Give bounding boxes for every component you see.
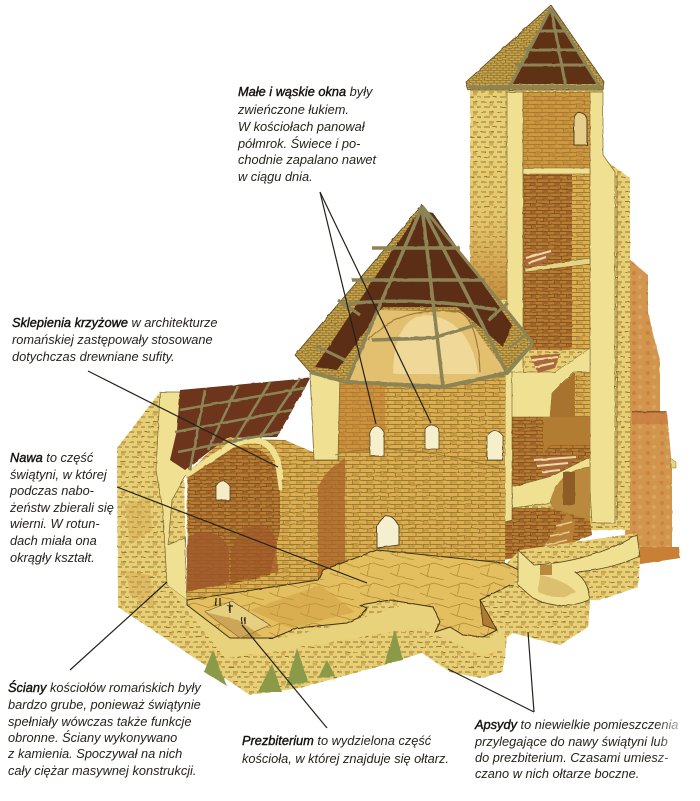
nave roof xyxy=(170,378,310,470)
tower interior side xyxy=(572,173,590,350)
text: okna: Małe i wąskie okna były xyxy=(238,84,372,99)
room lower xyxy=(503,508,592,560)
leader: okna right xyxy=(320,192,431,423)
nave vault interior xyxy=(188,447,280,590)
main body xyxy=(117,372,638,695)
pale cross wall xyxy=(505,348,590,417)
tower cut wall right xyxy=(590,92,615,523)
leader: apsydy left xyxy=(448,669,534,712)
vault rib xyxy=(186,440,282,490)
text: apsydy: czano w nich ołtarze boczne. xyxy=(475,766,639,781)
text: okna: W kościołach panował xyxy=(238,119,366,134)
text: prezbiterium: Prezbiterium to wydzielona część xyxy=(242,733,431,748)
small niche xyxy=(480,600,497,630)
leader: sklepienia xyxy=(88,371,278,467)
outer body silhouette xyxy=(117,392,638,695)
text: apsydy: do prezbiterium. Czasami umiesz- xyxy=(475,750,668,765)
text: nawa: wierni. W rotun- xyxy=(10,516,100,531)
tower window xyxy=(574,113,587,145)
text: nawa: okrągły kształt. xyxy=(10,550,95,565)
left wall blotches xyxy=(125,495,155,610)
text: okna: półmrok. Świece i po- xyxy=(237,136,360,151)
roof eave xyxy=(310,343,533,387)
tower floors xyxy=(523,168,590,174)
rotunda upper orange xyxy=(338,380,385,452)
stair 3 xyxy=(532,455,580,477)
leader: prezbiterium xyxy=(242,625,327,728)
text: sklepienia: dotychczas drewniane sufity. xyxy=(12,349,175,364)
conical roof xyxy=(295,205,533,387)
arch opening lower xyxy=(550,467,590,520)
nave window xyxy=(216,481,230,500)
pale floor band xyxy=(512,457,590,508)
nave floor shade xyxy=(250,585,355,628)
roof rafters xyxy=(343,207,507,387)
tower cut wall left xyxy=(507,92,523,400)
upper pier xyxy=(310,373,340,460)
text: nawa: dach miała ona xyxy=(10,533,97,548)
text: okna: zwieńczone łukiem. xyxy=(237,102,349,117)
pale column xyxy=(505,372,512,522)
stair 1 xyxy=(525,248,553,267)
text: sklepienia: Sklepienia krzyżowe w architekturze xyxy=(12,315,218,330)
floor and front wall xyxy=(167,550,528,658)
arch opening upper xyxy=(550,372,590,445)
tower roof rafters xyxy=(510,8,598,88)
text: sciany: spełniały wówczas także funkcje xyxy=(8,714,192,729)
tower interior lower xyxy=(523,173,572,350)
wing nub xyxy=(670,458,676,468)
text: okna: w ciągu dnia. xyxy=(238,169,313,184)
text: nawa: żeństw zbierali się xyxy=(9,500,114,515)
text: sklepienia: romańskiej zastępowały stosowane xyxy=(12,332,213,347)
text: okna: chodnie zapalano nawet xyxy=(238,152,376,167)
stair 4 xyxy=(541,512,575,550)
tower outer walls xyxy=(470,86,630,530)
leader: nawa xyxy=(117,487,367,583)
text: nawa: Nawa to część xyxy=(10,450,93,465)
rotunda windows xyxy=(370,426,384,456)
tower roof panels xyxy=(512,11,596,84)
roof dark panels xyxy=(315,210,512,370)
tower roof xyxy=(466,5,604,90)
wall top band xyxy=(167,585,505,658)
room upper xyxy=(512,417,590,488)
text: apsydy: Apsydy to niewielkie pomieszczenia xyxy=(475,717,678,732)
leader: apsydy right xyxy=(528,632,534,712)
text: nawa: świątyni, w której xyxy=(10,467,108,482)
text: apsydy: przylegające do nawy świątyni lub xyxy=(474,734,668,749)
stair 2 xyxy=(530,353,560,373)
lower arches xyxy=(187,525,278,592)
rotunda upper wall xyxy=(318,372,505,590)
text: sciany: Ściany kościołów romańskich były xyxy=(8,680,201,695)
leader: okna left xyxy=(320,192,376,424)
text: sciany: obronne. Ściany wykonywano xyxy=(8,730,177,745)
inner dome xyxy=(347,310,507,385)
text: sciany: bardzo grube, ponieważ świątynie xyxy=(8,697,201,712)
leader lines xyxy=(70,192,534,728)
trees xyxy=(204,630,403,692)
right orange wing xyxy=(625,258,680,564)
altar xyxy=(205,598,270,638)
nave back wall xyxy=(187,438,320,600)
tower interior upper xyxy=(523,92,590,168)
tower xyxy=(466,5,630,560)
apse door xyxy=(377,516,399,548)
apse curve xyxy=(318,450,505,590)
text: sciany: z kamienia. Spoczywał na nich xyxy=(7,746,182,761)
cut walls of nave xyxy=(156,392,189,600)
text: sciany: cały ciężar masywnej konstrukcji. xyxy=(8,763,196,778)
leader: sciany xyxy=(70,582,167,670)
text: nawa: podczas nabo- xyxy=(9,483,94,498)
nave roof rafters xyxy=(175,378,305,470)
floor xyxy=(187,550,528,638)
text: prezbiterium: kościoła, w której znajduje się ołtarz. xyxy=(242,751,449,766)
small apse xyxy=(510,535,640,645)
building illustration xyxy=(117,5,680,695)
